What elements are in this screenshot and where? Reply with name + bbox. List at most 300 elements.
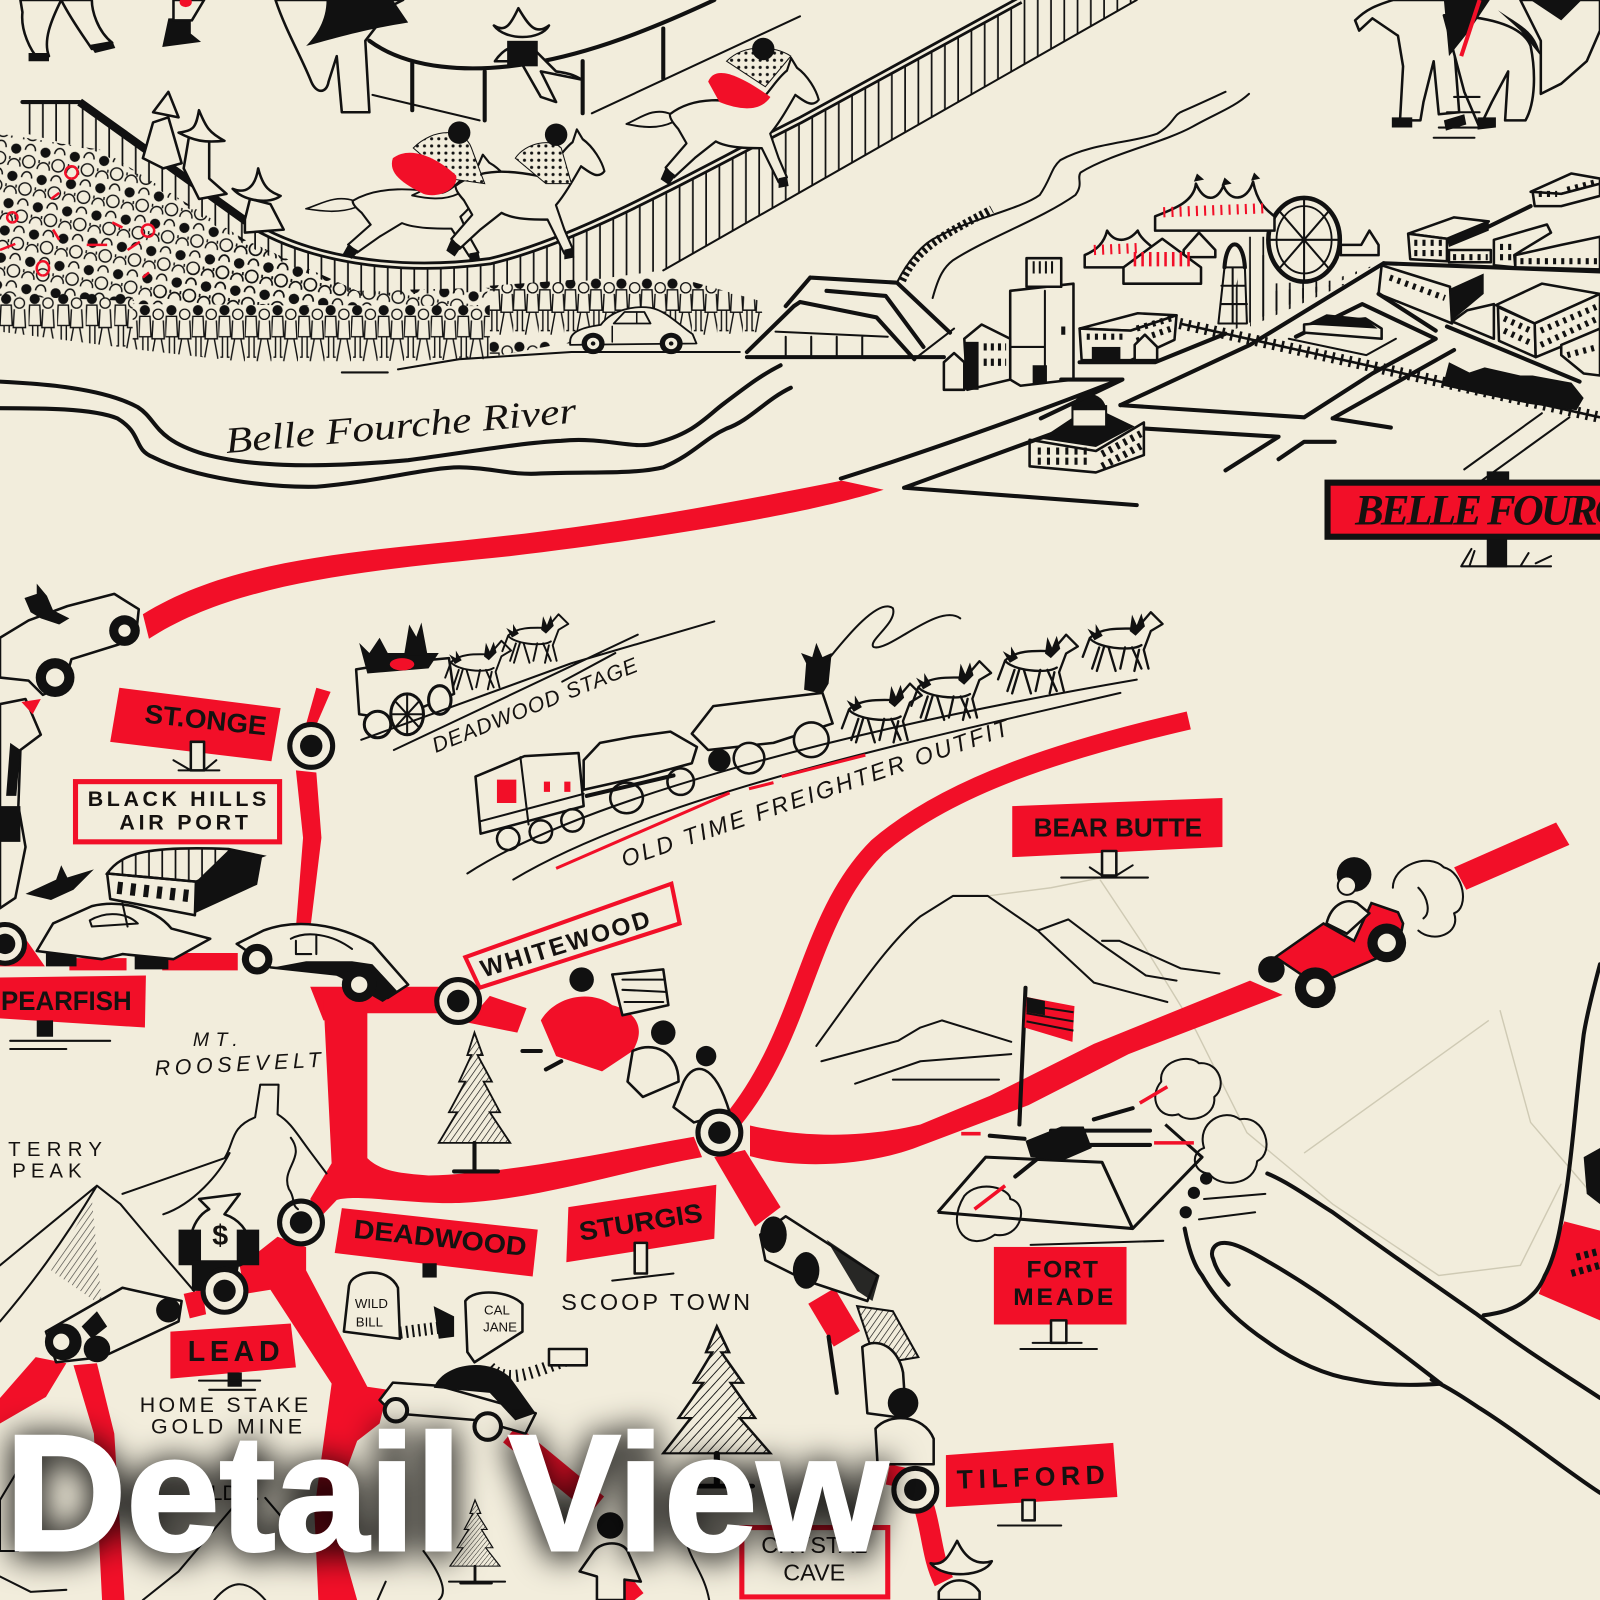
freighter label: OLD TIME FREIGHTER OUTFIT [618, 714, 1014, 872]
stage centre wheel spokes [393, 696, 421, 733]
torso [939, 1580, 980, 1600]
middle wagon reach [587, 776, 673, 796]
grave footstone [549, 1349, 587, 1365]
line two: GOLD MINE [151, 1415, 302, 1439]
small tent left [1085, 231, 1159, 267]
low building between blocks [1452, 304, 1494, 339]
crowd of spectators [0, 134, 765, 372]
chief tomahawk [829, 1337, 837, 1393]
watermark text: Detail View [5, 1401, 888, 1586]
red road marks [556, 755, 865, 868]
crowd heads centre [133, 240, 490, 306]
railway bridge ties [902, 209, 992, 281]
road to Belle Fourche [143, 481, 884, 639]
carnival ground hatching [1226, 237, 1380, 334]
second figure head [651, 1020, 676, 1045]
sign text: TILFORD [956, 1460, 1105, 1495]
headdress hatch [622, 980, 665, 1002]
spectators on fence [143, 117, 284, 233]
sign grass [1020, 1343, 1097, 1349]
sign board [110, 688, 281, 761]
fence top rail dark [80, 0, 1020, 266]
feather headdress [612, 969, 668, 1015]
streets heavy [841, 263, 1384, 505]
windows [291, 934, 352, 954]
red tent stripes [1134, 252, 1192, 266]
stage body [356, 658, 454, 719]
fence top rail highlight [245, 0, 1020, 266]
Scoop Town label: SCOOP TOWN [561, 1289, 750, 1315]
back wheel [156, 1298, 181, 1322]
courthouse [1030, 422, 1144, 472]
elevator window [1033, 327, 1065, 384]
courthouse roof [1041, 413, 1135, 447]
cowboy at bottom [931, 1541, 992, 1600]
Mount Roosevelt label [154, 1029, 323, 1081]
wagon roof line [480, 757, 584, 824]
car wheel [760, 1216, 787, 1253]
stage front wheel [429, 686, 451, 714]
warehouse door [1092, 347, 1120, 360]
sign post [1022, 1500, 1035, 1520]
chief body [862, 1343, 906, 1418]
rider horse one [1355, 0, 1459, 120]
sign text: ST.ONGE [143, 699, 268, 741]
circus big top [1155, 182, 1274, 231]
crowd heads [0, 134, 357, 306]
red striped tent [1123, 239, 1201, 284]
sign grass [998, 1525, 1061, 1527]
sign line two: CAVE [783, 1560, 845, 1586]
red scribble marks [0, 166, 154, 278]
hair [597, 1512, 623, 1539]
bridge deck panels [776, 329, 954, 359]
roadster rear hub [46, 668, 64, 687]
red highway network [0, 481, 1600, 1600]
sign text: DEADWOOD [352, 1214, 528, 1262]
figure head [569, 967, 594, 992]
small tent stripes [1094, 248, 1141, 250]
road on the right edge [1539, 1221, 1600, 1320]
car wheel two [793, 1252, 819, 1289]
small house [944, 353, 964, 390]
front hub [1306, 979, 1324, 997]
stage centre wheel [391, 694, 423, 735]
smoke cloud top [1155, 1059, 1221, 1119]
rider three red skirt [708, 73, 770, 108]
creek and footbridge [747, 92, 1249, 359]
road to Bear Butte direction [733, 720, 1189, 1120]
warehouse roof [1080, 313, 1177, 331]
rear hub [351, 977, 367, 993]
front wagon wheels [734, 722, 829, 773]
second figure [628, 1047, 679, 1097]
Terry Peak label [8, 1139, 102, 1183]
block building A front [1408, 234, 1447, 261]
road south from Sturgis [714, 1150, 781, 1227]
front hub [249, 951, 265, 967]
stage road lines [361, 621, 714, 750]
rear wheel [342, 967, 377, 1002]
sign post [635, 1243, 647, 1273]
teamster [801, 643, 832, 694]
dotted road start [1180, 1172, 1212, 1218]
pine tree near Whitewood [439, 1033, 510, 1171]
inner arena fence posts [412, 29, 663, 120]
Calamity Jane grave [465, 1292, 587, 1376]
rider horse three [1520, 0, 1600, 94]
body [237, 924, 408, 998]
black sedan [380, 1365, 536, 1440]
hooves [1392, 114, 1496, 131]
sign text: STURGIS [577, 1198, 705, 1247]
Indian chief and companion [829, 1306, 934, 1464]
car at St. Onge junction [0, 584, 140, 697]
Bear Butte sign [1012, 798, 1222, 878]
elevator centre line [1010, 291, 1045, 383]
sign grass [1461, 549, 1551, 566]
blanket legs [522, 1051, 561, 1069]
spectator hats [153, 92, 281, 201]
dollar sign: $ [212, 1220, 228, 1252]
windows [90, 903, 138, 927]
red gun flashes [961, 1087, 1194, 1209]
junction at St. Onge [290, 724, 333, 767]
junction at Whitewood [437, 980, 480, 1022]
dark underside [273, 961, 398, 1002]
highway bridge upper span [786, 278, 950, 347]
river lower bank [0, 388, 791, 487]
street between elevator and warehouse [1041, 334, 1226, 418]
sign board [946, 1443, 1117, 1507]
watermark shadow: Detail View [5, 1404, 888, 1589]
boots upper legs [173, 0, 204, 20]
inner arena fence upper rail [369, 0, 714, 68]
sign board [1012, 798, 1222, 857]
hall beside wheel [1341, 231, 1379, 255]
sign board [170, 1323, 296, 1379]
far block roof [1531, 173, 1600, 194]
low building dark roof [1306, 314, 1378, 329]
road from Whitewood to Deadwood [310, 1000, 702, 1219]
river upper bank [0, 365, 781, 465]
western road curve [0, 1357, 66, 1423]
streets thin [1464, 413, 1569, 481]
hangar front wall [107, 873, 196, 915]
white roadster [0, 594, 139, 695]
long road one [1267, 1173, 1600, 1398]
rear wheel [1367, 923, 1406, 962]
headstone [465, 1292, 522, 1362]
long building dark side [1450, 273, 1484, 320]
courthouse dome [1071, 394, 1106, 410]
second rider horse [412, 129, 604, 259]
mounted riders top right [1355, 0, 1600, 138]
big block side [1535, 294, 1600, 357]
bucking horse legs top left [20, 0, 112, 59]
creek bank one [897, 92, 1226, 283]
stage passengers [404, 622, 428, 655]
junction at Spearfish [0, 924, 24, 963]
hangar dark side [195, 850, 262, 913]
mine base [192, 1260, 240, 1291]
front wagon hub black [708, 749, 731, 771]
stage load [359, 638, 439, 673]
rider boots [162, 18, 201, 47]
freighter road lines [467, 680, 1137, 880]
sign board [994, 1247, 1127, 1324]
sign post [228, 1372, 242, 1387]
fort guns [990, 1108, 1150, 1177]
Ferris wheel [1268, 198, 1340, 282]
short link at Lead [184, 1290, 206, 1318]
dark rider detail [306, 0, 408, 46]
road by Tilford [888, 1474, 944, 1582]
body [37, 904, 210, 959]
Crystal Cave sign [742, 1528, 888, 1597]
hangar windows [117, 888, 189, 896]
southern mountains [0, 1469, 709, 1600]
main lower street [1379, 294, 1580, 382]
red stage accent [390, 658, 414, 670]
rearing body [0, 699, 41, 908]
Lead sign [170, 1323, 296, 1390]
smoke cloud left [957, 1187, 1021, 1241]
second wheel [84, 1336, 110, 1362]
rear wagon red windows [497, 780, 570, 803]
cupola windows [1033, 261, 1057, 273]
big block roof [1496, 284, 1600, 323]
road east of Whitewood [467, 996, 527, 1033]
ox team [842, 612, 1163, 742]
sign grass [612, 1273, 673, 1281]
western road south [73, 1363, 124, 1600]
sign board [0, 976, 146, 1028]
long road two [1432, 1380, 1600, 1493]
ground lines [1031, 1194, 1265, 1245]
block building B [1494, 224, 1551, 267]
sign line two: MEADE [1013, 1284, 1113, 1311]
dark marks on right red patch [1571, 1251, 1600, 1273]
figure at right edge [1584, 1148, 1600, 1204]
road through Spearfish [0, 939, 238, 970]
warehouse windows [1087, 318, 1171, 341]
woman walking [580, 1512, 641, 1600]
sedan rear wheel [474, 1413, 501, 1440]
sign grass [1061, 865, 1148, 878]
road from Deadwood to Lead and south [240, 1237, 388, 1600]
junction ring [0, 924, 24, 963]
house beside elevator [964, 324, 1010, 390]
grave footstone [434, 1306, 454, 1339]
big top red stripes [1163, 208, 1267, 212]
cowboy hat [494, 8, 549, 37]
steps under riders [1434, 97, 1480, 138]
hooves top left [29, 41, 115, 61]
driver face [1338, 877, 1356, 895]
third figure head [696, 1046, 716, 1066]
town of Belle Fourche [841, 172, 1600, 505]
rear wagon wheels [497, 809, 584, 850]
Belle Fourche River [0, 365, 791, 487]
Tilford sign [946, 1443, 1117, 1526]
road from Sturgis toward the east [750, 981, 1283, 1164]
sign board [566, 1185, 716, 1262]
crowd figures left [0, 293, 133, 349]
road to Whitewood [310, 987, 439, 1020]
sign grass [10, 1041, 110, 1049]
Deadwood sign [335, 1208, 538, 1278]
hairpin road inner [1212, 1243, 1441, 1384]
fort base [938, 1124, 1202, 1229]
headstone line two: BILL [356, 1315, 383, 1330]
red car with driver [1258, 857, 1463, 1008]
flag canton [1027, 997, 1045, 1015]
elevator cupola [1027, 258, 1061, 287]
highway bridge lower span [747, 302, 944, 359]
far block body [1533, 184, 1600, 206]
sign text: PEARFISH [1, 986, 132, 1016]
streets lighter [1120, 304, 1454, 470]
fence left corner [22, 100, 80, 104]
roadster front hub [118, 624, 131, 637]
headstone line two: JANE [483, 1320, 517, 1335]
cowboy vest [507, 41, 538, 66]
block building A annex [1449, 250, 1491, 262]
summit with tower [122, 1085, 327, 1214]
car dark roof [827, 1240, 880, 1301]
courthouse drum [1072, 406, 1106, 427]
long building front [1379, 265, 1452, 323]
lower peak [0, 1186, 194, 1321]
river name: Belle Fourche River [224, 389, 579, 461]
sign box [742, 1528, 888, 1597]
rider three shirt [727, 48, 791, 87]
red accent [21, 699, 41, 714]
front freight load [692, 693, 833, 750]
square platform [1289, 339, 1396, 355]
stage team second horse [445, 641, 511, 689]
crowd figures middle [133, 304, 490, 363]
Deadwood stage label: DEADWOOD STAGE [429, 653, 642, 758]
exhaust cloud [1393, 861, 1463, 937]
roadster front wheel [109, 615, 140, 646]
stage team lead horse [502, 614, 568, 663]
Deadwood stage wagon [356, 614, 714, 758]
sedan front wheel [385, 1399, 407, 1421]
flag pole [1019, 988, 1026, 1124]
row of shops [1515, 237, 1600, 269]
line two: PEAK [12, 1161, 82, 1183]
rider two shirt [515, 143, 571, 184]
peak shading [51, 1199, 102, 1306]
sign line one: BLACK HILLS [88, 787, 266, 811]
body [580, 1543, 641, 1600]
outer fence pickets [22, 0, 1137, 296]
hidden place label behind watermark: OLD T. [194, 1481, 260, 1505]
small grey tent [1184, 233, 1215, 257]
railroad rails [1180, 323, 1600, 417]
sign text: WHITEWOOD [478, 906, 653, 983]
front wheel [45, 1323, 82, 1360]
ox one [842, 684, 922, 742]
flag [1024, 997, 1074, 1042]
headdress [857, 1306, 918, 1362]
hangar roof [107, 848, 262, 882]
big top flags [1194, 172, 1260, 186]
Wild Bill grave [344, 1273, 454, 1339]
line two: ROOSEVELT [154, 1048, 323, 1081]
tower lattice [1218, 267, 1247, 323]
ground line below crowd [342, 352, 740, 372]
rider two head [545, 123, 567, 146]
car body [760, 1216, 878, 1301]
Whitewood sign [465, 884, 680, 988]
carnival ground extra hatching [1250, 255, 1347, 327]
sedan dark roof [434, 1365, 536, 1420]
courthouse windows side [1102, 434, 1141, 466]
middle wagon wheels [610, 768, 694, 813]
ox four [1083, 612, 1163, 671]
car body [1276, 903, 1403, 985]
figure at left edge [0, 699, 41, 908]
rodeo fence and rail [22, 0, 1137, 296]
water tower [1218, 244, 1247, 323]
Fort Meade emplacement [938, 988, 1266, 1245]
fence lower edge [663, 0, 1137, 270]
rider one red skirt [392, 153, 456, 195]
headstone [344, 1273, 400, 1339]
headstone line one: CAL [484, 1302, 510, 1317]
third figure [673, 1069, 730, 1122]
sign line two: AIR PORT [119, 811, 248, 835]
right rider horse [626, 58, 819, 188]
grave plot hatch [400, 1327, 449, 1333]
inner arena fence lower line [372, 16, 800, 120]
wheel inner rim [1277, 206, 1332, 273]
road north of St. Onge [305, 688, 331, 730]
junction at Sturgis [698, 1111, 741, 1154]
St. Onge sign [110, 688, 281, 770]
locomotive and train [1443, 362, 1584, 410]
line one: TERRY [8, 1139, 102, 1161]
window rows [1390, 182, 1598, 355]
roadster driver [24, 584, 69, 624]
car near Spearfish [37, 903, 210, 969]
long road three [1484, 964, 1600, 1315]
car south of Sturgis [760, 1216, 880, 1301]
Black Hills Air Port sign [76, 782, 280, 842]
sign line one: CRYSTAL [761, 1532, 867, 1558]
Detail View watermark [5, 1401, 888, 1589]
riders dark saddles [1444, 0, 1582, 56]
hat [931, 1541, 992, 1574]
sign board [1328, 483, 1600, 537]
junction hub [0, 934, 15, 954]
warehouse body [1080, 315, 1177, 360]
car between Spearfish and Whitewood [237, 924, 408, 1002]
red sash at top [180, 0, 192, 7]
grave fence hatch [490, 1357, 577, 1376]
bucking horse center [276, 0, 403, 112]
black roads on the right [1185, 964, 1600, 1493]
headstone line one: WILD [355, 1296, 388, 1311]
sign post [422, 1263, 437, 1278]
faint paper cracks [988, 878, 1592, 1276]
Spearfish sign [0, 976, 146, 1049]
Indian family on foot [522, 967, 730, 1122]
window [82, 1311, 107, 1339]
